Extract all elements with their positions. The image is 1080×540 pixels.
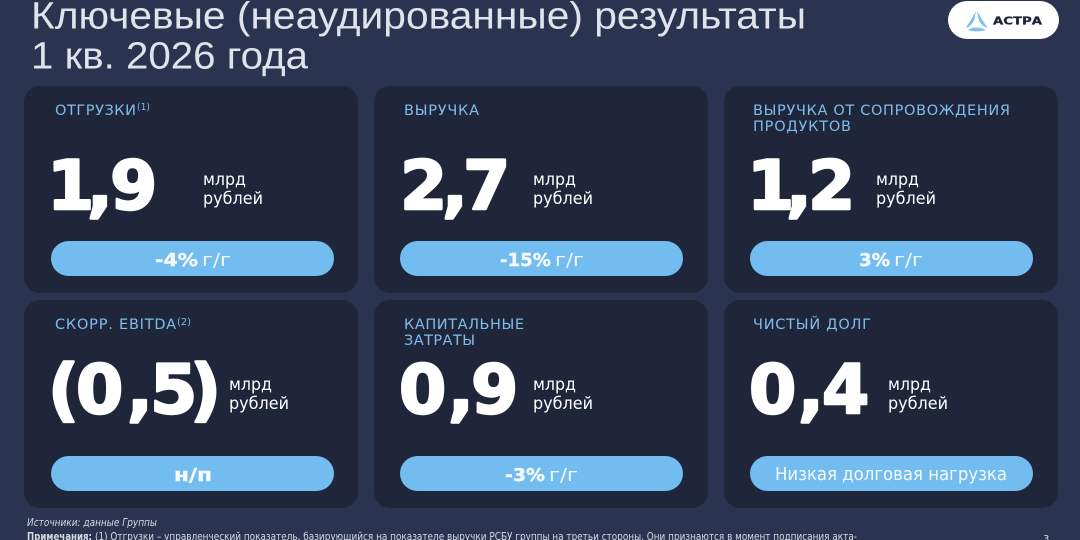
label xyxy=(404,317,524,349)
unit: рублей xyxy=(888,394,948,414)
label: СКОРР. EBITDA xyxy=(55,317,176,333)
label: ОТГРУЗКИ xyxy=(55,103,136,119)
label: ВЫРУЧКА ОТ СОПРОВОЖДЕНИЯ xyxy=(753,103,1010,119)
change pill: -4% xyxy=(155,250,198,271)
change pill: -15% xyxy=(500,250,551,271)
unit: млрд xyxy=(888,375,931,395)
change pill: -3% xyxy=(505,465,545,486)
change pill xyxy=(400,241,683,276)
change pill xyxy=(750,241,1033,276)
change pill: н/п xyxy=(174,465,212,486)
value: 0,4 xyxy=(749,351,869,430)
label: (2) xyxy=(177,317,191,328)
change pill xyxy=(750,456,1033,491)
value: 0,9 xyxy=(399,351,518,430)
panel: capex xyxy=(374,300,708,508)
panel: support revenue xyxy=(724,86,1058,293)
unit: млрд xyxy=(876,170,919,190)
unit: млрд xyxy=(229,375,272,395)
unit xyxy=(533,170,593,209)
unit: рублей xyxy=(876,189,936,209)
change pill: г/г xyxy=(549,465,578,486)
label xyxy=(753,103,1010,135)
label: ВЫРУЧКА xyxy=(404,103,479,119)
label: ЗАТРАТЫ xyxy=(404,333,475,349)
unit xyxy=(888,375,948,414)
value: 2,7 xyxy=(400,147,510,226)
unit: рублей xyxy=(203,189,263,209)
logo wordmark: АСТРА xyxy=(993,16,1043,28)
panel: net debt xyxy=(724,300,1058,508)
value: (0,5) xyxy=(48,351,221,430)
unit: млрд xyxy=(533,170,576,190)
unit: рублей xyxy=(229,394,289,414)
label: ПРОДУКТОВ xyxy=(753,119,851,135)
change pill: г/г xyxy=(555,250,584,271)
change pill: г/г xyxy=(894,250,923,271)
sources note: Источники: данные Группы xyxy=(27,517,157,529)
change pill: 3% xyxy=(859,250,890,271)
title xyxy=(31,0,806,78)
label: (1) xyxy=(137,102,150,113)
unit xyxy=(229,375,289,414)
change pill: г/г xyxy=(202,250,231,271)
panel: adjusted EBITDA xyxy=(24,300,358,508)
icon: logo triangle xyxy=(966,11,988,32)
unit xyxy=(876,170,936,209)
panel: revenue xyxy=(374,86,708,293)
unit: рублей xyxy=(533,394,593,414)
value: 1,2 xyxy=(747,147,855,226)
change pill xyxy=(51,456,334,491)
unit: млрд xyxy=(533,375,576,395)
change pill: Низкая долговая нагрузка xyxy=(775,464,1007,485)
panel: shipments xyxy=(24,86,358,293)
unit: млрд xyxy=(203,170,246,190)
unit xyxy=(533,375,593,414)
change pill xyxy=(400,456,683,491)
value: 1,9 xyxy=(47,147,157,226)
logo xyxy=(948,1,1059,39)
title: 1 кв. 2026 года xyxy=(31,36,309,78)
unit xyxy=(203,170,263,209)
change pill xyxy=(51,241,334,276)
label: КАПИТАЛЬНЫЕ xyxy=(404,317,524,333)
label: ЧИСТЫЙ ДОЛГ xyxy=(753,315,871,333)
unit: рублей xyxy=(533,189,593,209)
